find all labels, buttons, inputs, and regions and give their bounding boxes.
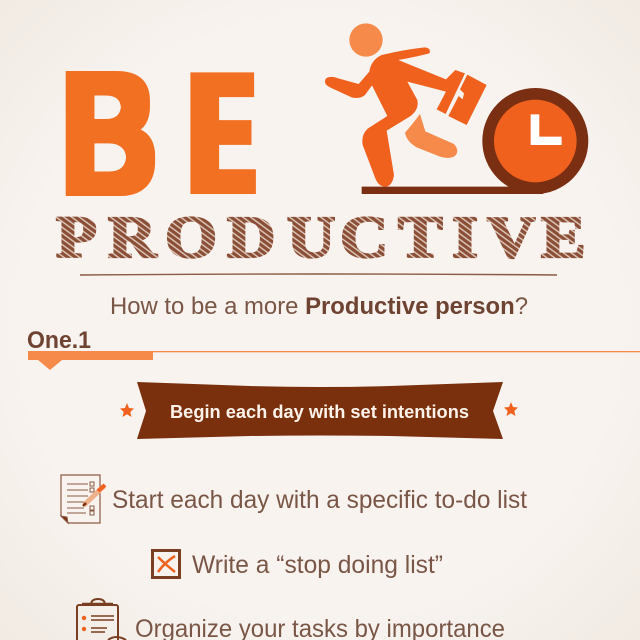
text: Write a “stop doing list”: [192, 551, 443, 579]
ground line: [362, 187, 543, 194]
text: Start each day with a specific to-do list: [112, 486, 527, 514]
icon: running businessman and clock: [325, 23, 588, 194]
banner: [120, 382, 518, 439]
item: stop doing list: [152, 550, 443, 579]
clock: [482, 88, 588, 194]
title: BE: B: [62, 37, 156, 230]
icon: notepad and pencil: [61, 475, 105, 523]
item: organize tasks: [77, 599, 505, 640]
title: BE: [62, 37, 251, 230]
briefcase: [448, 75, 487, 125]
icon: clipboard: [77, 599, 126, 640]
ribbon text: Begin each day with set intentions: [170, 402, 469, 422]
section label: One.1: [27, 327, 91, 354]
section tab: [28, 351, 153, 370]
subtitle: How to be a more Productive person?: [110, 293, 528, 320]
ribbon: [137, 382, 503, 439]
title: PRODUCTIVE: PRODUCTIVE: [56, 205, 586, 270]
section heading: One.1: [27, 327, 640, 370]
star right: [504, 402, 518, 416]
title: BE: E: [192, 41, 251, 227]
star left: [120, 403, 134, 417]
runner body: [325, 47, 465, 187]
section rule: [28, 351, 640, 352]
runner head: [349, 23, 383, 57]
icon: crossed box: [152, 550, 180, 578]
runner back leg: [405, 114, 457, 158]
item: to-do list: [61, 475, 527, 523]
divider line: [80, 274, 557, 275]
